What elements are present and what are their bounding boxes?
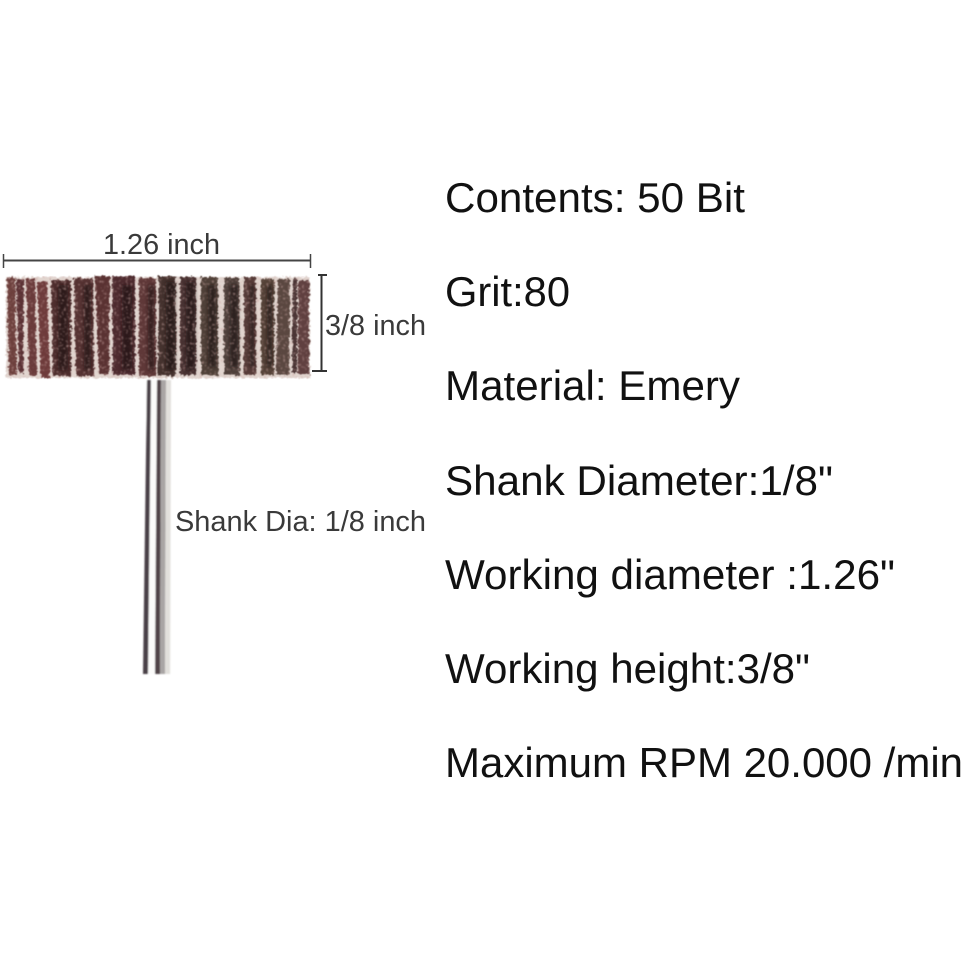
material: Material: Emery	[445, 362, 740, 409]
height dimension bracket	[312, 275, 327, 371]
grit: Grit:80	[445, 268, 570, 315]
shank diameter: Shank Diameter:1/8"	[445, 457, 833, 504]
contents: Contents: 50 Bit	[445, 174, 745, 221]
working diameter: Working diameter :1.26"	[445, 551, 895, 598]
dark flap shadows	[58, 282, 272, 370]
flap wheel	[6, 276, 310, 379]
shank label: Shank Dia: 1/8 inch	[175, 506, 426, 538]
width dimension line	[3, 254, 310, 268]
specification list	[445, 174, 963, 786]
infographic canvas	[2, 182, 960, 778]
working height: Working height:3/8"	[445, 645, 810, 692]
drive shank	[143, 380, 171, 674]
maximum rpm: Maximum RPM 20.000 /min	[445, 739, 963, 786]
abrasive grain texture	[6, 276, 310, 379]
width label: 1.26 inch	[103, 229, 220, 261]
height label: 3/8 inch	[325, 310, 426, 342]
